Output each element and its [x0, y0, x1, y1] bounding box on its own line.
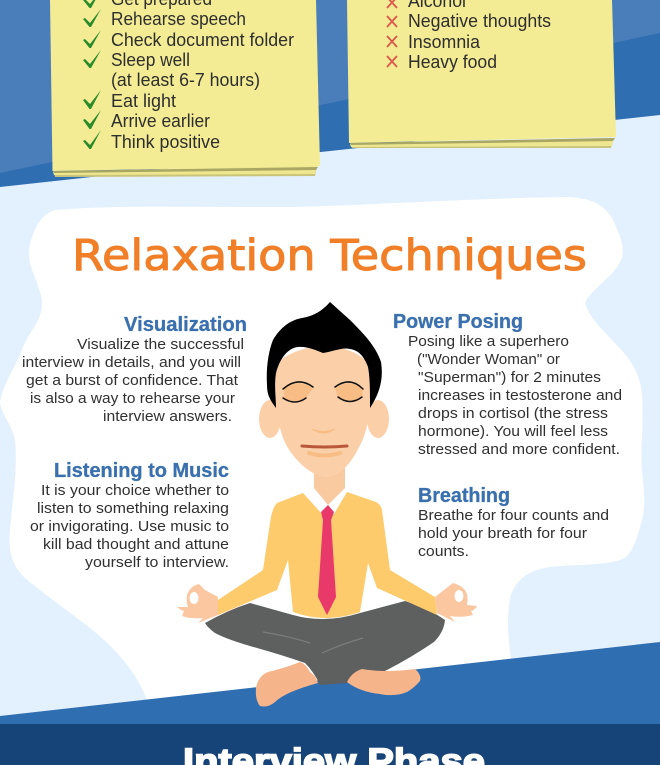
text block: breathing: Breathing [418, 485, 510, 507]
bottom blue band [0, 642, 660, 725]
hair [267, 302, 382, 408]
title: Relaxation Techniques [72, 231, 587, 281]
do list text: Arrive earlier [111, 111, 210, 131]
text block: power posing: drops in cortisol (the stress [418, 405, 608, 422]
text block: power posing: Posing like a superhero [408, 333, 569, 350]
text block: power posing: ("Wonder Woman" or [417, 351, 560, 368]
panel: do list note [50, 0, 320, 177]
text block: visualization: interview answers. [103, 408, 232, 425]
do list text: Rehearse speech [111, 9, 246, 29]
tie [318, 505, 336, 615]
shirt [218, 492, 437, 618]
do list text [111, 0, 294, 152]
text block: listening to music: yourself to interview. [85, 554, 229, 571]
avoid list text [408, 0, 551, 72]
do list text: Eat light [111, 91, 176, 111]
footer band [0, 724, 660, 765]
nose [312, 429, 335, 433]
right finger hole [454, 590, 464, 602]
do list text: (at least 6-7 hours) [111, 70, 260, 90]
text block: power posing [393, 311, 622, 458]
text block: visualization: Visualization [124, 314, 247, 336]
text block: breathing: counts. [418, 543, 469, 560]
text block: listening to music: or invigorating. Use music to [30, 518, 229, 535]
text block: visualization: is also a way to rehearse your [30, 390, 235, 407]
left finger hole [190, 592, 198, 604]
avoid list text: Heavy food [408, 52, 497, 72]
left foot [256, 662, 318, 706]
text block: visualization: interview in details, and you will [22, 354, 241, 371]
eye shading [284, 383, 363, 401]
text block: power posing: Power Posing [393, 311, 523, 333]
text block: listening to music: kill bad thought and attune [43, 536, 229, 553]
panel: white blob background [0, 197, 644, 700]
icon: cross marks [387, 0, 397, 67]
do list text: Think positive [111, 132, 220, 152]
panel: avoid list note [347, 0, 616, 148]
do list text: Check document folder [111, 30, 294, 50]
pants highlights [263, 632, 363, 653]
ears [259, 400, 389, 438]
text block: listening to music: It is your choice whether to [41, 482, 229, 499]
mouth [302, 446, 347, 447]
right foot [347, 669, 420, 695]
text block: visualization [22, 314, 247, 425]
lower lip [309, 453, 340, 456]
avoid list text: Insomnia [408, 32, 481, 52]
text block: breathing [418, 485, 609, 560]
collar [303, 488, 348, 514]
avoid list text: Negative thoughts [408, 11, 551, 31]
text block: power posing: stressed and more confident. [418, 441, 620, 458]
text block: breathing: hold your breath for four [418, 525, 587, 542]
text block: listening to music: listen to something relaxing [37, 500, 229, 517]
text block: power posing: increases in testosterone and [418, 387, 622, 404]
text block: listening to music [30, 460, 229, 571]
illustration: meditating man [177, 302, 477, 706]
text block: power posing: "Superman") for 2 minutes [418, 369, 601, 386]
face [275, 346, 371, 477]
neck [314, 468, 345, 510]
left hand [177, 584, 218, 623]
right hand [435, 583, 477, 622]
pants [205, 601, 445, 685]
text block: breathing: Breathe for four counts and [418, 507, 609, 524]
icon: check marks [83, 0, 101, 149]
do list text: Sleep well [111, 50, 190, 70]
text block: visualization: Visualize the successful [77, 336, 244, 353]
text block: listening to music: Listening to Music [54, 460, 229, 482]
text block: power posing: hormone). You will feel less [418, 423, 608, 440]
eyebrows and eyelids [283, 382, 363, 402]
text block: visualization: get a burst of confidence. That [26, 372, 239, 389]
